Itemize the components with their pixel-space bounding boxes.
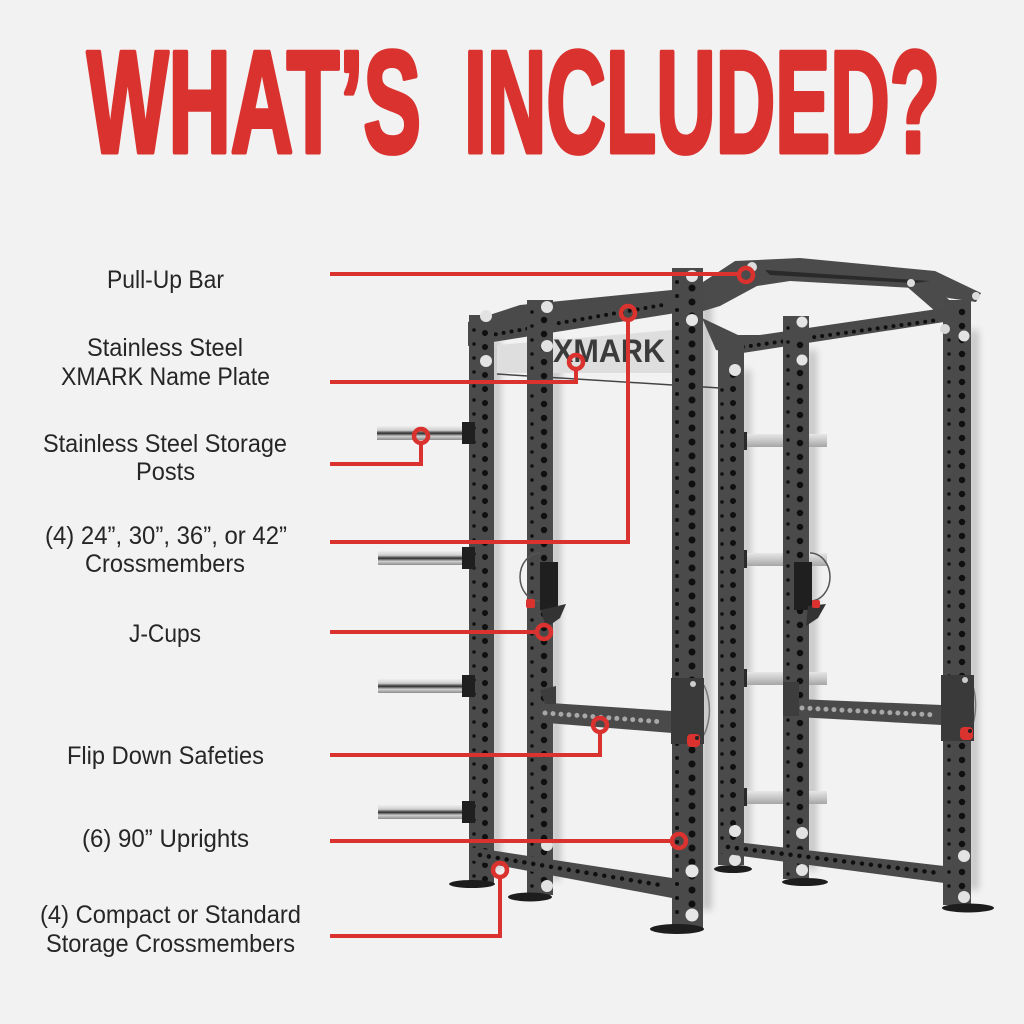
flip down safety right (783, 682, 942, 725)
upright 5 (782, 316, 828, 886)
callout: Flip Down Safeties (67, 718, 607, 770)
callout: Stainless Steel Storage Posts (43, 429, 428, 486)
flip down safety left (535, 686, 672, 733)
callout: J-Cups (129, 620, 551, 648)
callout: Crossmembers: Crossmembers (85, 550, 245, 578)
callout: Stainless Steel XMARK Name Plate: Stainless Steel (87, 334, 243, 362)
title: WHAT’S (87, 21, 421, 183)
callout: Storage Crossmembers: (4) Compact or Standard (40, 901, 301, 929)
top crossmember back (702, 308, 944, 354)
J-cup left (520, 553, 566, 628)
safety bracket front with red latch (671, 678, 709, 747)
upright 4 (714, 345, 752, 873)
callout: Stainless Steel XMARK Name Plate (61, 334, 583, 391)
callout: Crossmembers: (4) 24”, 30”, 36”, or 42” (45, 522, 287, 550)
plate logo: XMARK (553, 333, 665, 369)
name plate (497, 330, 720, 388)
J-cup right (794, 553, 830, 626)
upright 1 (449, 310, 495, 888)
left storage posts (377, 422, 475, 823)
pull-up bar (700, 258, 981, 324)
callout: Pull-Up Bar: Pull-Up Bar (107, 266, 224, 294)
upright 2 (508, 300, 553, 902)
callout: Stainless Steel XMARK Name Plate: XMARK Name Plate (61, 363, 270, 391)
top crossmember front (468, 289, 682, 346)
callout: Storage Crossmembers: Storage Crossmembers (46, 930, 295, 958)
callout: Storage Crossmembers (40, 863, 507, 958)
upright 3 (650, 268, 704, 934)
callout: Uprights (82, 825, 686, 853)
callout: Flip Down Safeties: Flip Down Safeties (67, 742, 264, 770)
callout: J-Cups: J-Cups (129, 620, 201, 648)
upright 6 (940, 300, 994, 912)
rack illustration (377, 258, 994, 934)
lower storage crossmember left (470, 847, 672, 898)
upright shadows (492, 300, 978, 910)
callout: Crossmembers (45, 306, 635, 578)
callout: Stainless Steel Storage Posts: Posts (136, 458, 195, 486)
callout: Uprights: (6) 90” Uprights (82, 825, 249, 853)
safety bracket back with red latch (941, 675, 976, 741)
callout: Pull-Up Bar (107, 266, 753, 294)
back frame: right storage posts (740, 432, 827, 806)
callout: Stainless Steel Storage Posts: Stainless Steel Storage (43, 430, 287, 458)
title (87, 21, 940, 183)
lower storage crossmember right (719, 840, 944, 883)
